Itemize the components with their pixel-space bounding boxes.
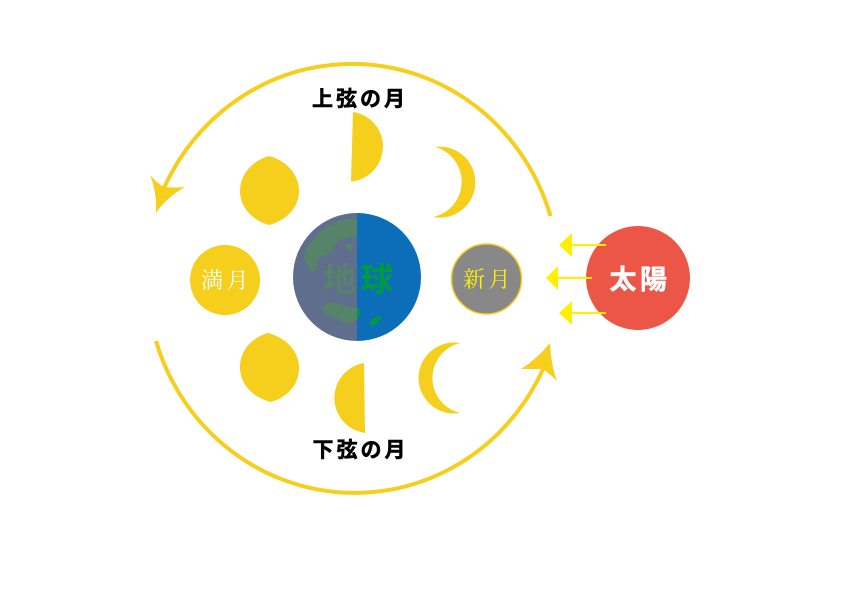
earth: 地 (323, 261, 356, 298)
moon: new moon (452, 244, 522, 314)
arrow: sunlight middle (546, 266, 592, 290)
moon: last quarter (334, 363, 365, 433)
sun: 太陽 (610, 265, 670, 295)
moon: first quarter (351, 112, 383, 182)
arrow: sunlight top (559, 233, 606, 257)
moon: waxing gibbous (240, 156, 299, 225)
earth: 球 (360, 261, 393, 298)
moon: new moon: 新月 (463, 267, 514, 292)
moon: full moon (190, 245, 260, 315)
arrow: lower orbit arc (156, 341, 557, 493)
earth (293, 213, 421, 341)
moon: full moon: 満月 (201, 268, 252, 293)
moon: waning crescent (419, 342, 460, 414)
sun (586, 226, 690, 330)
arrow: upper orbit arc (150, 64, 550, 216)
moon: waning gibbous (240, 333, 299, 402)
moon: waxing crescent (433, 147, 475, 218)
label: last quarter moon: 下弦の月 (312, 439, 408, 462)
label: first quarter moon: 上弦の月 (312, 88, 408, 111)
arrow: sunlight bottom (559, 301, 606, 325)
